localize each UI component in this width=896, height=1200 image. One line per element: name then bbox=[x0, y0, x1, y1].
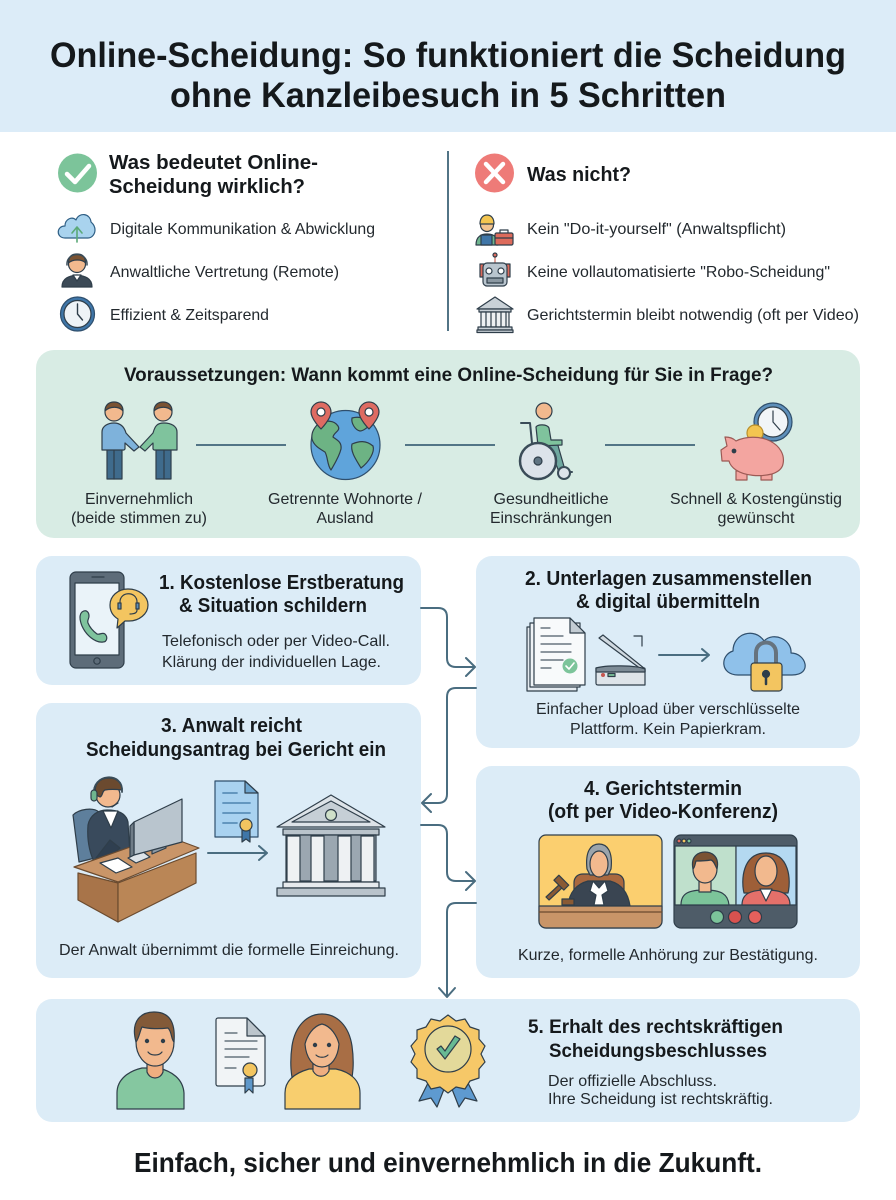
icon: lawyer headset bbox=[62, 254, 92, 287]
text: kein do-it-yourself: Kein "Do-it-yourself" (Anwaltspflicht) bbox=[527, 221, 786, 238]
panel: step 5 bbox=[36, 999, 860, 1122]
heading: step 2 bbox=[525, 568, 812, 613]
heading: step 3: 3. Anwalt reicht bbox=[161, 715, 302, 737]
connector line bbox=[405, 444, 495, 446]
title: ohne Kanzleibesuch in 5 Schritten bbox=[170, 76, 726, 115]
heading: step 2: 2. Unterlagen zusammenstellen bbox=[525, 568, 812, 590]
heading: was bedeutet: Scheidung wirklich? bbox=[109, 175, 305, 198]
icon: wheelchair bbox=[520, 403, 572, 479]
text: step 5: Der offizielle Abschluss. bbox=[548, 1073, 717, 1090]
heading: voraussetzungen: Voraussetzungen: Wann kommt eine Online-Scheidung für Sie in Frage? bbox=[124, 364, 773, 386]
text: step 1: Klärung der individuellen Lage. bbox=[162, 654, 381, 671]
labels: voraussetzungen items: (beide stimmen zu) bbox=[71, 510, 207, 527]
icon: piggy bank with clock bbox=[721, 403, 792, 480]
labels: voraussetzungen items: Ausland bbox=[316, 510, 374, 527]
panel: step 4 bbox=[476, 766, 860, 978]
illustration: woman bbox=[285, 1014, 360, 1109]
arrow: step 2 to step 3 bbox=[422, 688, 476, 812]
heading: was bedeutet bbox=[109, 151, 318, 198]
icon: handshake people bbox=[102, 402, 177, 479]
icon: handyman bbox=[476, 215, 513, 245]
footer tagline: Einfach, sicher und einvernehmlich in die Zukunft. bbox=[134, 1147, 762, 1178]
heading: step 5 bbox=[528, 1016, 783, 1062]
arrow: lawyer to court bbox=[208, 846, 267, 860]
arrow: step 4 to step 5 bbox=[439, 903, 476, 997]
icon: blue certificate bbox=[215, 781, 258, 842]
divider bbox=[447, 151, 449, 331]
icon: green check bbox=[58, 154, 97, 192]
illustration: judge bbox=[539, 835, 662, 928]
icon: cloud upload bbox=[58, 215, 95, 242]
labels: voraussetzungen items: Einschränkungen bbox=[490, 510, 612, 527]
labels: voraussetzungen items: Gesundheitliche bbox=[494, 491, 609, 508]
labels: voraussetzungen items bbox=[71, 491, 842, 527]
text: step 1 bbox=[162, 633, 390, 671]
heading: step 4: (oft per Video-Konferenz) bbox=[548, 801, 778, 823]
icon: scanner bbox=[596, 635, 645, 685]
text: step 5: Ihre Scheidung ist rechtskräftig. bbox=[548, 1091, 773, 1108]
connector line bbox=[196, 444, 286, 446]
icon: cloud with padlock bbox=[724, 633, 805, 691]
heading: step 2: & digital übermitteln bbox=[576, 591, 760, 613]
title bbox=[50, 36, 846, 115]
text: anwaltliche vertretung: Anwaltliche Vertretung (Remote) bbox=[110, 264, 339, 281]
header banner bbox=[0, 0, 896, 132]
icon: document stack bbox=[527, 618, 585, 691]
illustration: decree document bbox=[216, 1018, 265, 1093]
heading: step 5: Scheidungsbeschlusses bbox=[549, 1040, 767, 1062]
text: step 4: Kurze, formelle Anhörung zur Bestätigung. bbox=[518, 947, 818, 964]
icon: courthouse small bbox=[477, 297, 513, 332]
arrow: scanner to cloud bbox=[659, 649, 709, 661]
icon: red cross bbox=[475, 154, 514, 192]
arrow: step 1 to step 2 bbox=[421, 608, 475, 676]
panel: step 1 bbox=[36, 556, 421, 685]
icon: courthouse large bbox=[277, 795, 385, 896]
heading: step 4: 4. Gerichtstermin bbox=[584, 778, 742, 800]
text: keine robo-scheidung: Keine vollautomatisierte "Robo-Scheidung" bbox=[527, 264, 830, 281]
icon: phone with support bubble bbox=[70, 572, 148, 668]
title: Online-Scheidung: So funktioniert die Scheidung bbox=[50, 36, 846, 75]
heading: step 3: Scheidungsantrag bei Gericht ein bbox=[86, 739, 386, 761]
text: step 2: Einfacher Upload über verschlüsselte bbox=[536, 701, 800, 718]
panel: voraussetzungen bbox=[36, 350, 860, 538]
illustration: man bbox=[117, 1012, 184, 1109]
heading: step 5: 5. Erhalt des rechtskräftigen bbox=[528, 1016, 783, 1038]
heading: step 4 bbox=[548, 778, 778, 823]
labels: voraussetzungen items: Getrennte Wohnorte / bbox=[268, 491, 423, 508]
text: step 2: Plattform. Kein Papierkram. bbox=[570, 721, 766, 738]
text: step 5 bbox=[548, 1073, 773, 1108]
panel: step 3 bbox=[36, 703, 421, 978]
illustration: lawyer at desk bbox=[73, 777, 199, 922]
panel: was nicht bbox=[475, 154, 859, 332]
illustration: video conference bbox=[674, 835, 797, 928]
text: gerichtstermin bleibt: Gerichtstermin bleibt notwendig (oft per Video) bbox=[527, 307, 859, 324]
panel: was bedeutet online-scheidung bbox=[58, 151, 375, 331]
heading: was bedeutet: Was bedeutet Online- bbox=[109, 151, 318, 174]
text: digitale kommunikation: Digitale Kommunikation & Abwicklung bbox=[110, 221, 375, 238]
labels: voraussetzungen items: gewünscht bbox=[718, 510, 795, 527]
connector line bbox=[605, 444, 695, 446]
heading: step 1: & Situation schildern bbox=[179, 595, 367, 617]
arrow: step 3 to step 4 bbox=[421, 825, 475, 890]
icon: globe with pins bbox=[311, 402, 380, 480]
text: step 2 bbox=[536, 701, 800, 738]
heading: was nicht: Was nicht? bbox=[527, 163, 631, 186]
panel: step 2 bbox=[476, 556, 860, 748]
labels: voraussetzungen items: Schnell & Kostengünstig bbox=[670, 491, 842, 508]
text: step 1: Telefonisch oder per Video-Call. bbox=[162, 633, 390, 650]
heading: step 1 bbox=[159, 572, 404, 617]
text: effizient: Effizient & Zeitsparend bbox=[110, 307, 269, 324]
icon: robot bbox=[480, 253, 510, 286]
icon: clock bbox=[60, 297, 94, 331]
icon: seal badge bbox=[411, 1015, 485, 1107]
labels: voraussetzungen items: Einvernehmlich bbox=[85, 491, 193, 508]
heading: step 1: 1. Kostenlose Erstberatung bbox=[159, 572, 404, 594]
text: step 3: Der Anwalt übernimmt die formelle Einreichung. bbox=[59, 942, 399, 959]
heading: step 3 bbox=[86, 715, 386, 761]
